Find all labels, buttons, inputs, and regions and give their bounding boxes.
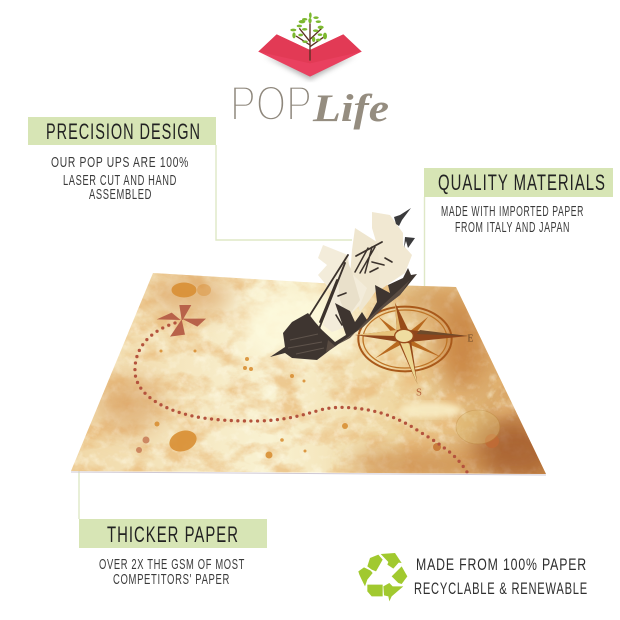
compass rose: S <box>416 387 422 398</box>
logo <box>230 12 389 131</box>
map card <box>60 208 560 482</box>
text: made from 100% paper <box>414 555 588 598</box>
logo tree <box>290 12 327 61</box>
icon: recycling arrows <box>358 553 407 601</box>
text: precision design: LASER CUT AND HAND <box>63 173 177 189</box>
dotted treasure route <box>135 323 467 472</box>
connector: thicker paper <box>78 470 80 519</box>
logo red book <box>258 34 362 77</box>
map stains <box>136 282 499 458</box>
pop-up ship <box>270 208 417 360</box>
compass rose: E <box>467 334 473 345</box>
heading: precision design: PRECISION DESIGN <box>46 119 201 144</box>
compass rose <box>355 303 473 398</box>
ship flag and pennants <box>394 208 415 248</box>
text: quality materials <box>441 204 584 236</box>
ship hull <box>270 268 417 360</box>
ship bow highlights <box>288 334 324 354</box>
ship sails <box>318 212 412 332</box>
text: precision design <box>51 155 189 203</box>
text: thicker paper <box>99 557 245 588</box>
ship rigging and masts <box>310 242 392 334</box>
text: precision design: ASSEMBLED <box>89 187 152 203</box>
heading: thicker paper <box>79 519 267 548</box>
connector: quality materials <box>424 197 426 286</box>
text: precision design: OUR POP UPS ARE 100% <box>51 155 189 171</box>
text: thicker paper: COMPETITORS' PAPER <box>113 572 230 588</box>
ship hull side <box>326 280 410 352</box>
connector: precision design <box>216 145 352 240</box>
logo book shadow <box>263 55 357 80</box>
heading: thicker paper: THICKER PAPER <box>107 522 239 547</box>
heading: precision design <box>28 117 216 145</box>
logo wordmark Life: Life <box>312 87 389 130</box>
map coffee ring <box>456 410 500 444</box>
text: thicker paper: OVER 2X THE GSM OF MOST <box>99 557 245 573</box>
treasure X mark <box>157 305 206 337</box>
map paper edge <box>71 472 546 475</box>
logo wordmark POP: POP <box>230 77 312 131</box>
